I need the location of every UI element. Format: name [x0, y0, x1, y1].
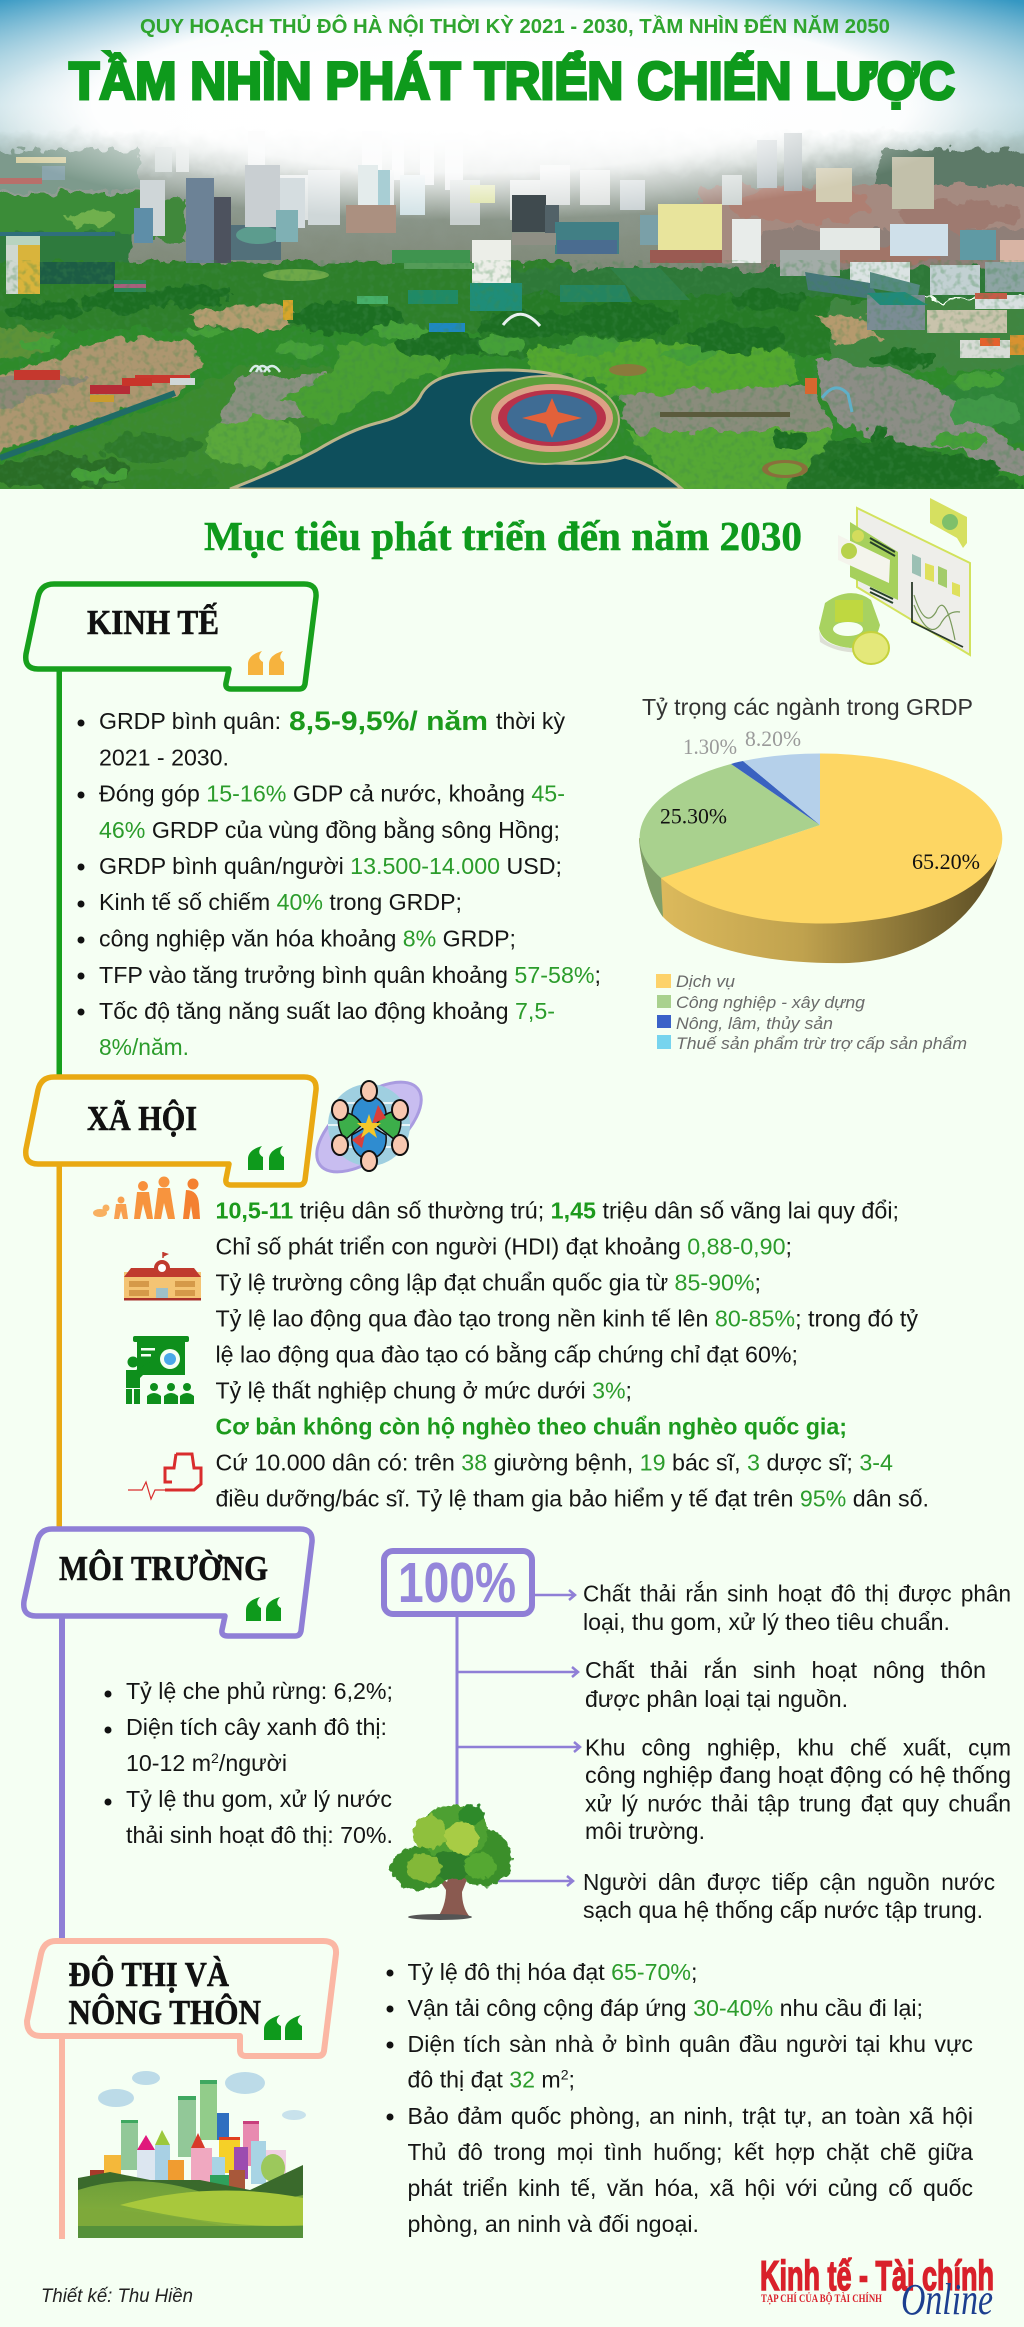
construction dirt upper: [186, 305, 300, 330]
bullet list: urban targets: Thủ đô trong mọi tình huống; kết hợp chặt chẽ giữa: [408, 2139, 973, 2165]
text: urban solid waste: Chất thải rắn sinh hoạt đô thị được phân: [583, 1580, 1011, 1606]
label tab: do thi: [27, 1941, 336, 2056]
chart legend: Thuế sản phẩm trừ trợ cấp sản phẩm: [676, 1034, 967, 1053]
arrow 4: [487, 1876, 573, 1886]
timeline: do thi: [59, 2035, 65, 2239]
bullet list: economic targets: GRDP bình quân:: [99, 708, 281, 734]
pie slice: Cong nghiep 25.3%: [640, 764, 820, 878]
publisher logo: Online: [901, 2275, 993, 2324]
bullet list: economic targets: thời kỳ: [496, 708, 566, 734]
chart title: Tỷ trọng các ngành trong GRDP: [642, 694, 973, 720]
lake: [230, 370, 682, 489]
label tab: xa hoi: [26, 1077, 316, 1185]
fog over skyline: [16, 122, 925, 216]
bullet list: urban targets: Vận tải công cộng đáp ứng 30-40% nhu cầu đi lại;: [408, 1995, 923, 2021]
panel: xa hoi: [26, 1065, 929, 1530]
chart legend: [656, 972, 967, 1053]
designer credit: Thiết kế: Thu Hiền: [41, 2286, 193, 2307]
label tab: do thi: ĐÔ THỊ VÀ: [68, 1954, 230, 1994]
right-hand lawns: [530, 340, 800, 396]
pie slice: Nong lam 1.3%: [731, 761, 820, 825]
publisher logo: [760, 2252, 994, 2324]
bullet list: urban targets: [386, 1959, 973, 2237]
icon: family ages: [93, 1176, 200, 1219]
label tab: xa hoi: XÃ HỘI: [87, 1098, 197, 1138]
road right: [815, 360, 1024, 490]
distant towers: [155, 154, 172, 172]
main title: TẦM NHÌN PHÁT TRIỂN CHIẾN LƯỢC: [69, 51, 955, 111]
pie slice: Thue 8.2%: [743, 754, 820, 825]
text: clean water: sạch qua hệ thống cấp nước tập trung.: [583, 1897, 983, 1923]
central green belt base: [0, 258, 572, 334]
chart legend: Dịch vụ: [676, 972, 736, 991]
lower-left park: [0, 363, 334, 489]
bullet list: environment left: Tỷ lệ thu gom, xử lý nước: [126, 1786, 392, 1812]
text: industrial wastewater: [585, 1734, 1011, 1844]
pie labels: 1.30%: [683, 734, 737, 759]
bullet list: environment left: [104, 1678, 393, 1848]
bullet list: environment left: 10-12 m: [126, 1750, 210, 1776]
text: urban solid waste: [583, 1580, 1011, 1635]
bullet list: economic targets: [78, 706, 601, 1060]
bullet list: urban targets: phòng, an ninh và đối ngoại.: [408, 2211, 699, 2237]
timeline: moi truong: [59, 1616, 65, 1942]
text: industrial wastewater: môi trường.: [585, 1818, 705, 1844]
pie depth: [639, 838, 1001, 963]
wall along site: [0, 393, 175, 458]
label tab: moi truong: MÔI TRƯỜNG: [59, 1548, 268, 1588]
bullet list: environment left: Tỷ lệ che phủ rừng: 6,2%;: [126, 1678, 393, 1704]
buses: [14, 370, 60, 380]
text block: social targets: Cứ 10.000 dân có: trên 38 giường bệnh, 19 bác sĩ, 3 dược sĩ; 3-4: [216, 1450, 893, 1476]
bullet list: economic targets: 2021 - 2030.: [99, 744, 229, 770]
bullet list: urban targets: ;: [569, 2066, 575, 2092]
text: clean water: [583, 1869, 995, 1923]
bullet list: urban targets: Diện tích sàn nhà ở bình quân đầu người tại khu vực: [408, 2031, 973, 2057]
chart legend: Nông, lâm, thủy sản: [676, 1014, 833, 1033]
icon: tree: [391, 1805, 512, 1920]
chart: GRDP share pie: [639, 694, 1002, 1053]
text block: social targets: điều dưỡng/bác sĩ. Tỷ lệ tham gia bảo hiểm y tế đạt trên 95% dân số.: [216, 1486, 929, 1512]
bullet list: economic targets: TFP vào tăng trưởng bình quân khoảng 57-58%;: [99, 962, 601, 988]
pie labels: [660, 726, 980, 874]
label tab: do thi: NÔNG THÔN: [68, 1992, 261, 2032]
stat box: 100%: 100%: [398, 1551, 516, 1615]
chart legend: Công nghiệp - xây dựng: [676, 993, 866, 1012]
pie slice: Dich vu 65.2%: [661, 753, 1002, 923]
bullet list: economic targets: Đóng góp 15-16% GDP cả nước, khoảng 45-: [99, 780, 565, 806]
pie labels: 8.20%: [745, 726, 801, 751]
text block: social targets: Tỷ lệ trường công lập đạt chuẩn quốc gia từ 85-90%;: [216, 1270, 761, 1296]
label tab: kinh te: KINH TẾ: [87, 602, 219, 642]
text: clean water: Người dân được tiếp cận nguồn nước: [583, 1869, 995, 1895]
bullet list: economic targets: Tốc độ tăng năng suất lao động khoảng 7,5-: [99, 998, 555, 1024]
text: rural solid waste: [585, 1657, 986, 1712]
text: industrial wastewater: Khu công nghiệp, khu chế xuất, cụm: [585, 1734, 1011, 1760]
arrow 1: [534, 1590, 575, 1600]
section heading: Mục tiêu phát triển đến năm 2030: [204, 513, 802, 559]
bullet list: environment left: Diện tích cây xanh đô thị:: [126, 1714, 387, 1740]
left field: [0, 193, 140, 235]
label tab: kinh te: [26, 584, 316, 689]
text block: social targets: Tỷ lệ lao động qua đào tạo trong nền kinh tế lên 80-85%; trong đó tỷ: [216, 1306, 918, 1332]
text block: social targets: 10,5-11 triệu dân số thường trú; 1,45 triệu dân số vãng lai quy đổi;: [216, 1198, 899, 1224]
bullet list: urban targets: Tỷ lệ đô thị hóa đạt 65-70%;: [408, 1959, 698, 1985]
timeline: xa hoi: [56, 1165, 62, 1530]
bullet list: environment left: thải sinh hoạt đô thị: 70%.: [126, 1822, 393, 1848]
subtitle: QUY HOẠCH THỦ ĐÔ HÀ NỘI THỜI KỲ 2021 - 2030, TẦM NHÌN ĐẾN NĂM 2050: [140, 14, 890, 38]
icon: medical cross: [128, 1454, 201, 1499]
arrow 2: [457, 1667, 578, 1677]
icon: data dashboard: [819, 498, 970, 664]
illustration: colorful city on hills: [78, 2071, 306, 2238]
text block: social targets: [216, 1198, 929, 1512]
text block: social targets: Chỉ số phát triển con người (HDI) đạt khoảng 0,88-0,90;: [216, 1234, 792, 1260]
text block: social targets: Tỷ lệ thất nghiệp chung ở mức dưới 3%;: [216, 1378, 632, 1404]
bullet list: economic targets: 8%/năm.: [99, 1034, 189, 1060]
island mosaic: [471, 376, 619, 464]
bullet list: economic targets: 46% GRDP của vùng đồng bằng sông Hồng;: [99, 817, 560, 843]
bullet list: urban targets: Bảo đảm quốc phòng, an ninh, trật tự, an toàn xã hội: [408, 2103, 973, 2129]
icon: community globe: [302, 1065, 436, 1189]
bullet list: environment left: 2: [211, 1750, 219, 1766]
bullet list: economic targets: Kinh tế số chiếm 40% trong GRDP;: [99, 889, 462, 915]
bullet list: economic targets: GRDP bình quân/người 13.500-14.000 USD;: [99, 853, 562, 879]
text: urban solid waste: loại, thu gom, xử lý theo tiêu chuẩn.: [583, 1609, 950, 1635]
bullet list: economic targets: 8,5-9,5%/ năm: [289, 706, 488, 736]
bullet list: urban targets: phát triển kinh tế, văn hóa, xã hội với củng cố quốc: [408, 2175, 973, 2201]
soft canopy texture: [0, 260, 1024, 490]
panel: moi truong: [24, 1529, 1011, 1942]
bullet list: environment left: /người: [219, 1750, 287, 1776]
text: industrial wastewater: xử lý nước thải tập trung đạt quy chuẩn: [585, 1790, 1011, 1816]
tree canopy clumps: [7, 285, 1000, 485]
text block: social targets: Cơ bản không còn hộ nghèo theo chuẩn nghèo quốc gia;: [216, 1414, 847, 1440]
near buildings: [140, 180, 165, 236]
label tab: moi truong: [24, 1529, 312, 1636]
pie labels: 25.30%: [660, 804, 727, 828]
text: industrial wastewater: công nghiệp đang hoạt động có hệ thống: [585, 1762, 1011, 1788]
icon: training teacher: [126, 1336, 194, 1404]
icon: school building: [124, 1252, 201, 1300]
text: rural solid waste: được phân loại tại nguồn.: [585, 1686, 848, 1712]
bullet list: economic targets: công nghiệp văn hóa khoảng 8% GRDP;: [99, 926, 516, 952]
bullet list: urban targets: 2: [561, 2066, 569, 2082]
timeline: kinh te: [56, 669, 62, 1079]
panel: do thi va nong thon: [27, 1941, 973, 2239]
bare construction ground left: [0, 337, 205, 462]
text: rural solid waste: Chất thải rắn sinh hoạt nông thôn: [585, 1657, 986, 1683]
dirt right: [815, 315, 880, 345]
connector trunk: [456, 1616, 458, 1811]
arrow 3: [457, 1742, 580, 1752]
publisher logo: TẠP CHÍ CỦA BỘ TÀI CHÍNH: [761, 2291, 882, 2305]
pie labels: 65.20%: [912, 849, 980, 874]
hero photo: aerial view of Hanoi park and city: [0, 0, 1024, 520]
bullet list: urban targets: đô thị đạt 32 m: [408, 2066, 561, 2092]
text block: social targets: lệ lao động qua đào tạo có bằng cấp chứng chỉ đạt 60%;: [216, 1342, 798, 1368]
panel: kinh te: [26, 584, 601, 1079]
